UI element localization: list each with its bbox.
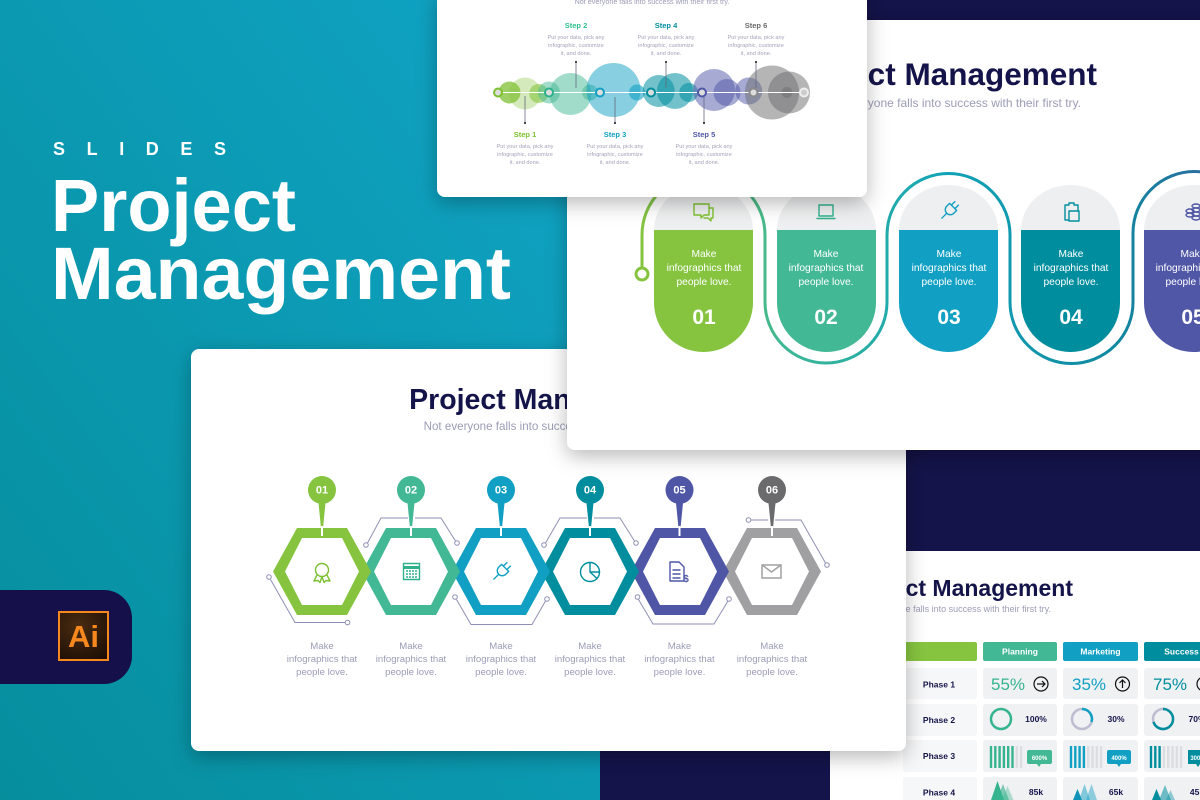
step 6 label <box>728 21 785 57</box>
row: phase 3: 600% <box>1032 756 1048 762</box>
hexagon step 6: people love. <box>746 667 798 678</box>
panel: pill steps slide <box>567 20 1200 450</box>
pill step 4: people love. <box>1044 277 1098 288</box>
pill slide title: Project Management <box>789 56 1097 92</box>
hexagon step 1: people love. <box>296 667 348 678</box>
pill step 3: Make <box>937 249 962 260</box>
step 6 label: Step 6 <box>745 21 767 30</box>
hexagon step 5: Make <box>668 641 691 652</box>
hexagon step 3: Make <box>489 641 513 652</box>
hexagon step 1: Make <box>310 641 334 652</box>
step 2 label: Step 2 <box>565 21 587 30</box>
step 4 label <box>638 21 695 57</box>
step 2 label: Put your data, pick any <box>548 35 605 41</box>
step 4 label: infographic, customize <box>638 43 694 49</box>
pill step 1: 01 <box>692 306 716 329</box>
row: phase 2: 100% <box>1025 714 1047 724</box>
pill step 4 <box>1021 185 1120 352</box>
pill step 4: Make <box>1059 249 1084 260</box>
panel: bubble timeline slide <box>437 0 867 197</box>
row: phase 3: Phase 3 <box>923 751 955 761</box>
hexagon slide subtitle: Not everyone falls into success with their first try. <box>424 420 673 433</box>
row: phase 4: 65k <box>1109 787 1123 797</box>
hexagon step 6: Make <box>760 641 784 652</box>
step 1 label: Step 1 <box>514 130 536 139</box>
hexagon step 3 <box>452 476 550 678</box>
step 6 label: infographic, customize <box>728 43 784 49</box>
table header row <box>903 642 1200 661</box>
pill step 5 <box>1144 185 1200 352</box>
badge: Adobe Illustrator <box>0 590 132 684</box>
pill step 1: people love. <box>677 277 731 288</box>
hexagon step 4: Make <box>578 641 602 652</box>
pill step 1: Make <box>692 249 717 260</box>
hexagon step 5: people love. <box>654 667 705 678</box>
pill step 2: people love. <box>799 277 853 288</box>
pill step 2: 02 <box>814 306 838 329</box>
pill step 2: infographics that <box>789 263 864 274</box>
step 4 label: it, and done. <box>651 51 682 57</box>
panel: hexagon process slide <box>191 349 906 751</box>
hexagon step 3: people love. <box>475 667 527 678</box>
main title: Project <box>51 164 296 247</box>
hexagon step 5 <box>631 476 729 678</box>
hexagon step 5: $ <box>683 574 689 585</box>
row: phase 2: Phase 2 <box>923 715 955 725</box>
serpentine connector line <box>636 172 1200 363</box>
row: phase 2 <box>903 704 1200 736</box>
table header row: Success <box>1164 646 1199 656</box>
background: navy block <box>600 0 1200 800</box>
pill step 3: infographics that <box>912 263 987 274</box>
hexagon step 2: people love. <box>385 667 437 678</box>
step 3 label: it, and done. <box>600 160 631 166</box>
pill step 2: Make <box>814 249 839 260</box>
table subtitle: Not everyone falls into success with their first try. <box>857 604 1051 614</box>
hexagon step 5: infographics that <box>644 654 715 665</box>
step 6 label: it, and done. <box>741 51 772 57</box>
hexagon step 2: 02 <box>405 484 417 496</box>
row: phase 1 <box>903 668 1200 699</box>
hexagon step 6: infographics that <box>737 654 808 665</box>
step 3 label: Step 3 <box>604 130 626 139</box>
table header row: Marketing <box>1080 646 1121 656</box>
background: teal gradient <box>0 0 600 800</box>
eyebrow: slides: SLIDES <box>53 139 226 159</box>
hexagon step 2: infographics that <box>376 654 447 665</box>
hexagon step 6: 06 <box>766 484 778 496</box>
row: phase 1: 35% <box>1072 675 1106 694</box>
hexagon step 1 <box>273 476 371 678</box>
hexagon step 4 <box>541 476 639 678</box>
hexagon step 4: infographics that <box>555 654 626 665</box>
hexagon step 5: 05 <box>673 484 686 496</box>
step 3 label: infographic, customize <box>587 152 643 158</box>
hexagon step 4: 04 <box>584 484 597 496</box>
hexagon step 4: people love. <box>564 667 616 678</box>
panel: comparison table slide <box>830 551 1200 800</box>
pill step 4: 04 <box>1059 306 1083 329</box>
step 2 label: it, and done. <box>561 51 592 57</box>
row: phase 2: 30% <box>1107 714 1125 724</box>
step 1 label: Put your data, pick any <box>497 144 554 150</box>
pill step 1: infographics that <box>667 263 742 274</box>
step 4 label: Put your data, pick any <box>638 35 695 41</box>
row: phase 4: Phase 4 <box>923 788 955 798</box>
row: phase 4 <box>903 777 1200 800</box>
row: phase 1: 75% <box>1153 675 1187 694</box>
badge: Adobe Illustrator: Ai <box>68 619 99 654</box>
pill step 1 <box>654 185 753 352</box>
step 5 label: Put your data, pick any <box>676 144 733 150</box>
hexagon step 1: infographics that <box>287 654 358 665</box>
row: phase 1: Phase 1 <box>923 680 955 690</box>
pill step 3: 03 <box>937 306 961 329</box>
step 2 label <box>548 21 605 57</box>
table title: Project Management <box>848 575 1073 601</box>
hexagon step 2 <box>362 476 460 678</box>
step 5 label <box>676 130 733 166</box>
step 1 label <box>497 130 554 166</box>
hexagon step 3: 03 <box>495 484 507 496</box>
step 1 label: infographic, customize <box>497 152 553 158</box>
row: phase 4: 85k <box>1029 787 1043 797</box>
main title <box>51 164 511 315</box>
step 3 label <box>587 130 644 166</box>
row: phase 3: 400% <box>1111 756 1127 762</box>
hexagon slide title: Project Management <box>409 384 688 416</box>
hexagon step 1: 01 <box>316 484 328 496</box>
step 3 label: Put your data, pick any <box>587 144 644 150</box>
table header row: Planning <box>1002 646 1038 656</box>
step 2 label: infographic, customize <box>548 43 604 49</box>
bubble chart <box>494 61 810 124</box>
hexagon step 2: Make <box>399 641 423 652</box>
step 5 label: Step 5 <box>693 130 715 139</box>
connector lines <box>267 518 829 625</box>
pill step 2 <box>777 185 876 352</box>
pill slide subtitle: Not everyone falls into success with their first try. <box>822 96 1081 110</box>
pill step 3: people love. <box>922 277 976 288</box>
hexagon step 6 <box>723 476 821 678</box>
pill step 4: infographics that <box>1034 263 1109 274</box>
step 6 label: Put your data, pick any <box>728 35 785 41</box>
row: phase 1: 55% <box>991 675 1025 694</box>
row: phase 3 <box>903 740 1200 772</box>
step 1 label: it, and done. <box>510 160 541 166</box>
step 5 label: infographic, customize <box>676 152 732 158</box>
step 4 label: Step 4 <box>655 21 678 30</box>
hexagon step 3: infographics that <box>466 654 537 665</box>
step 5 label: it, and done. <box>689 160 720 166</box>
pill step 3 <box>899 185 998 352</box>
main title: Management <box>51 232 511 315</box>
